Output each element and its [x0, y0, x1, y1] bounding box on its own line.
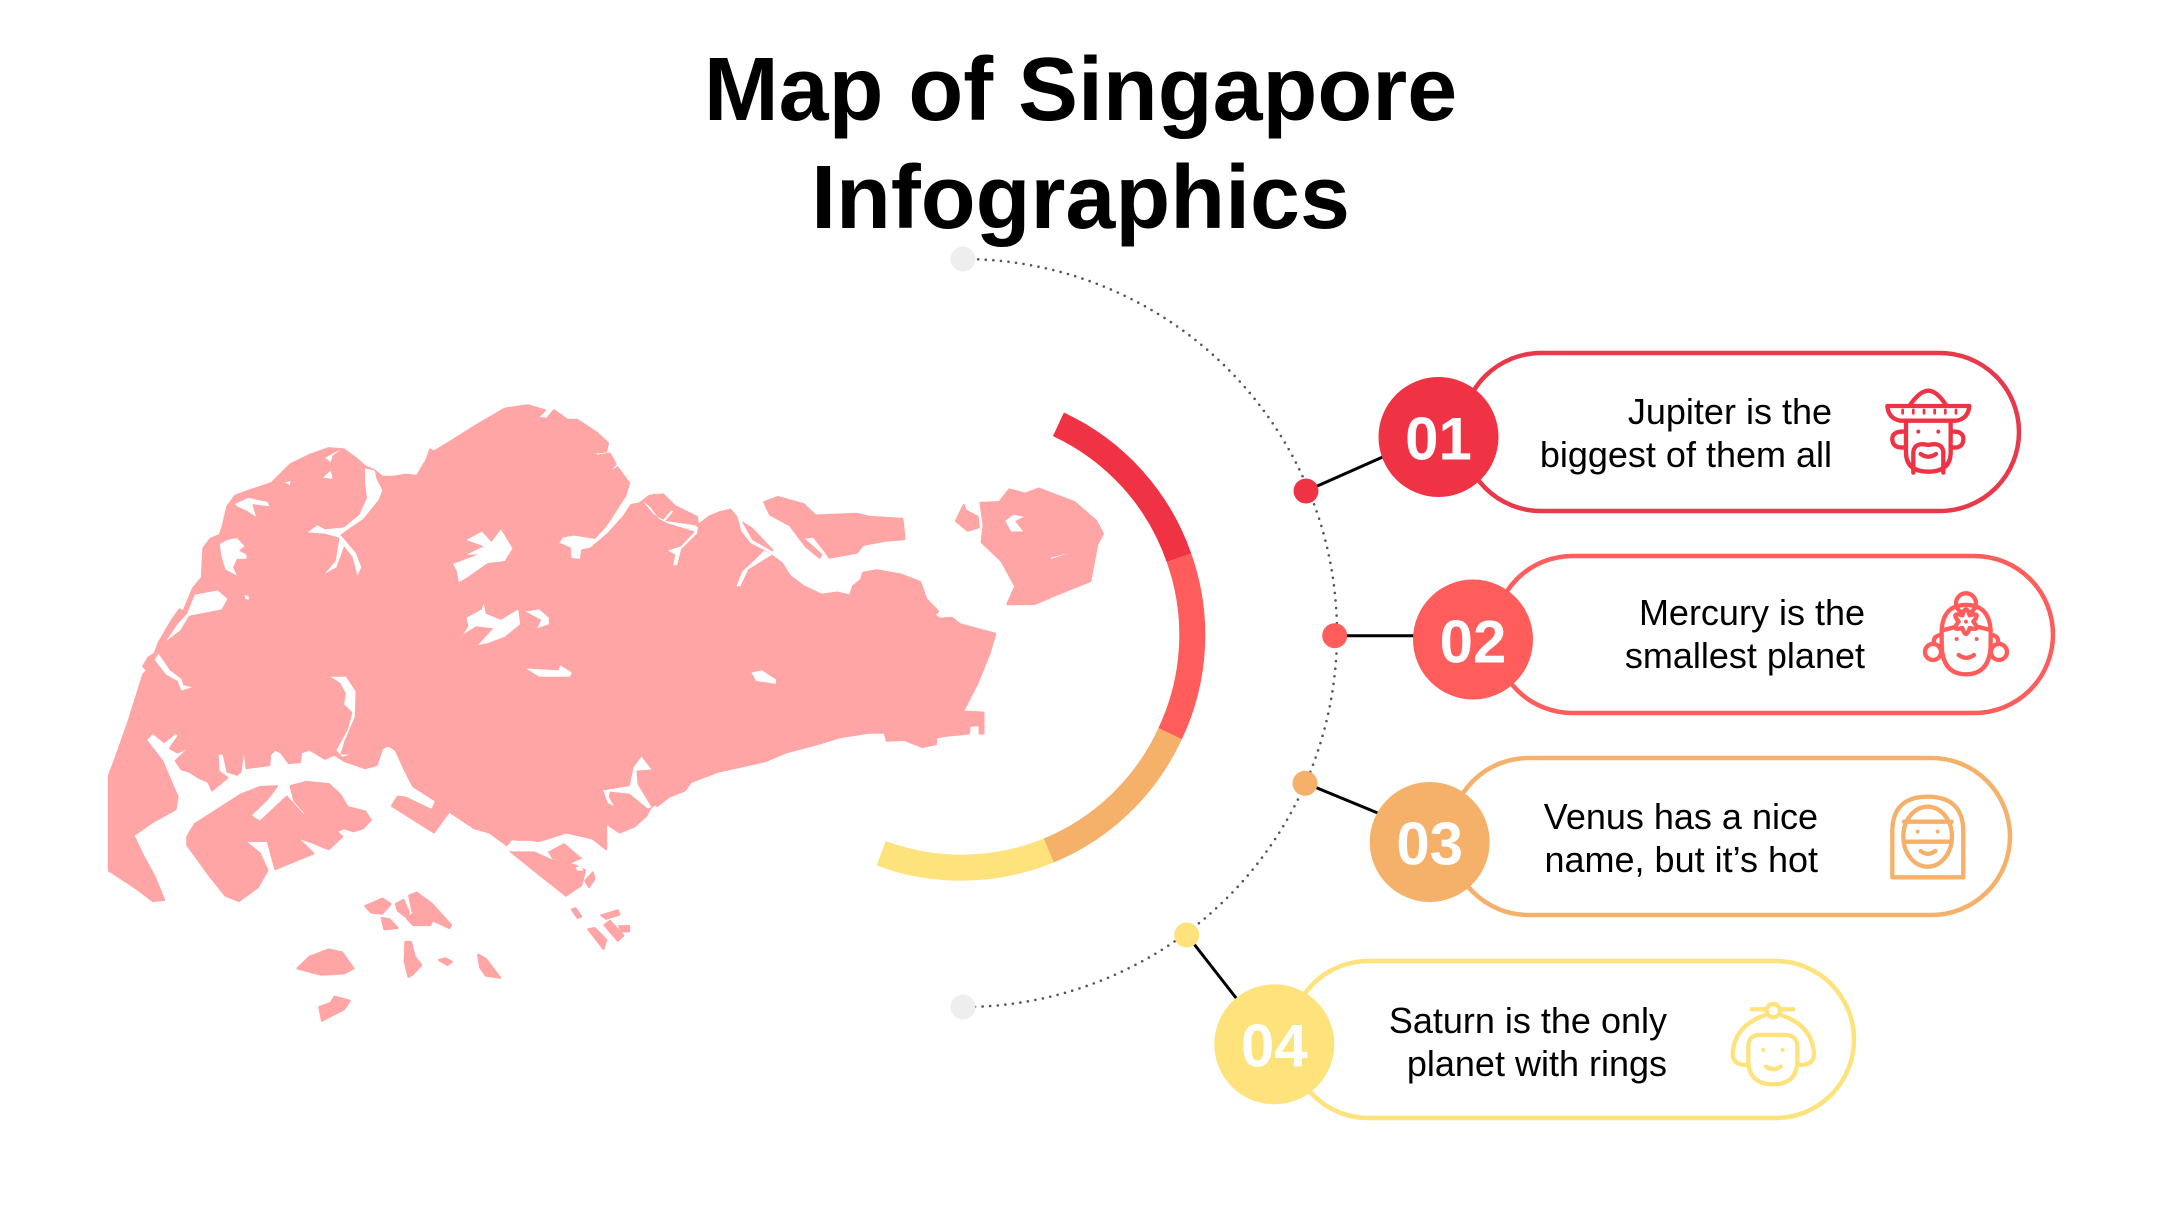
text 01: [1540, 391, 1832, 475]
segmented ring: [881, 424, 1192, 868]
number badge 04: 04: [1241, 1012, 1308, 1080]
icon: girl with hair bun: [1733, 1004, 1814, 1084]
marker dot 02: [1322, 623, 1347, 648]
dotted arc: [963, 259, 1337, 1007]
panel: 01 Jupiter: [1294, 353, 2019, 511]
icon: veiled woman: [1892, 797, 1963, 877]
pill outline 03: [1450, 758, 2010, 915]
gray dot bottom: [950, 994, 976, 1020]
pill outline 01: [1462, 353, 2019, 511]
connector 04: [1187, 935, 1240, 1003]
gray dot top: [950, 246, 976, 272]
icon: man with hat: [1887, 391, 1969, 473]
connector 02: [1335, 634, 1416, 637]
marker dot 04: [1174, 922, 1199, 948]
title: Map of Singapore: [704, 40, 1457, 140]
panel: 04 Saturn: [1174, 922, 1854, 1118]
pill outline 02: [1494, 556, 2053, 713]
text 03: name, but it’s hot: [1544, 839, 1818, 880]
pill outline 04: [1290, 961, 1854, 1118]
text 01: biggest of them all: [1540, 434, 1832, 475]
number badge 03: [1370, 782, 1490, 902]
number badge 02: 02: [1440, 608, 1506, 676]
text 02: smallest planet: [1625, 635, 1865, 676]
number badge 01: [1378, 377, 1498, 497]
connector 03: [1305, 783, 1385, 816]
panel: 02 Mercury: [1322, 556, 2053, 713]
text 01: Jupiter is the: [1628, 391, 1832, 432]
number badge 03: 03: [1396, 810, 1463, 878]
map of Singapore: [109, 405, 1103, 1021]
marker dot 03: [1292, 771, 1318, 796]
icon: woman with flower: [1925, 593, 2007, 674]
number badge 04: [1214, 984, 1334, 1104]
text 02: [1625, 592, 1865, 676]
text 04: Saturn is the only: [1389, 1000, 1667, 1041]
text 03: [1544, 796, 1818, 880]
text 04: [1389, 1000, 1667, 1084]
number badge 02: [1413, 580, 1533, 700]
title: [704, 40, 1457, 248]
text 03: Venus has a nice: [1544, 796, 1818, 837]
panel: 03 Venus: [1292, 758, 2010, 915]
connector 01: [1306, 456, 1385, 491]
text 04: planet with rings: [1407, 1043, 1667, 1084]
number badge 01: 01: [1405, 406, 1472, 472]
text 02: Mercury is the: [1639, 592, 1865, 633]
marker dot 01: [1294, 478, 1318, 504]
title: Infographics: [811, 148, 1350, 248]
